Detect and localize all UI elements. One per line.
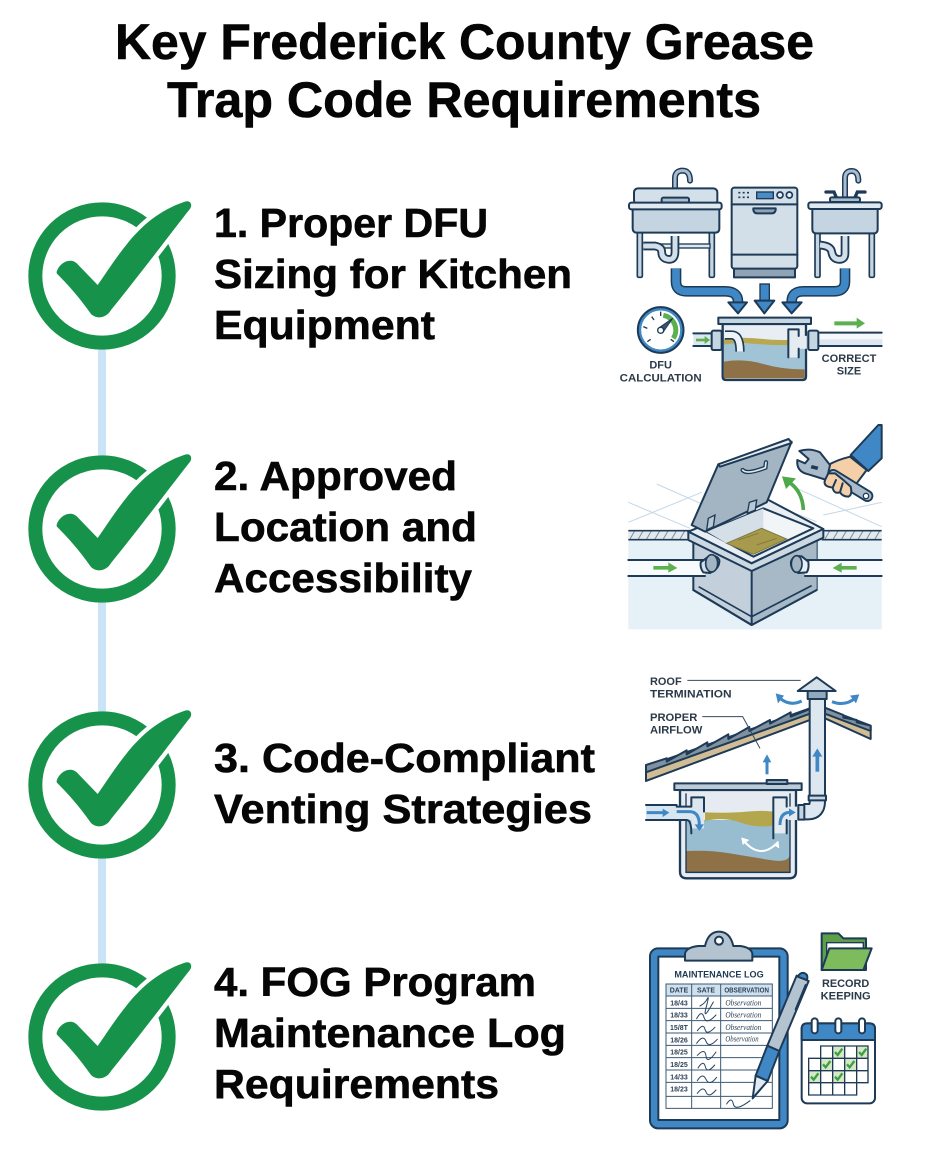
flow arrows into trap [676,268,845,313]
airflow arrows [763,693,859,774]
illustration: location and accessibility [628,425,882,629]
log table: DATE [670,988,689,995]
label: record keeping [821,978,871,1002]
label: DFU calculation [620,359,702,384]
folder icon [822,933,872,970]
heading: requirement 2: Location and [214,504,477,550]
title: Trap Code Requirements [167,72,761,128]
left sink [629,171,722,277]
timeline connector 3 [98,857,106,965]
label: proper airflow: AIRFLOW [650,725,703,737]
green flow arrow [834,318,865,329]
log table: 18/25 [670,1050,688,1057]
pipes [628,555,882,576]
outlet baffle [773,797,800,838]
heading: requirement 2 [214,453,477,601]
label: record keeping: KEEPING [821,990,871,1002]
icon: check badge 3 [35,710,191,852]
pen [753,973,809,1098]
log table: 14/33 [670,1074,688,1081]
label: proper airflow: PROPER [650,712,697,724]
log table: 18/25 [670,1062,688,1069]
log title: MAINTENANCE LOG [674,969,764,979]
heading: requirement 1: Sizing for Kitchen [214,251,572,297]
heading: requirement 2: Accessibility [214,555,472,601]
title: Key Frederick County Grease [115,14,814,70]
label: roof termination: ROOF [650,676,682,688]
green arrow left pipe [653,562,677,573]
log table: 18/26 [670,1037,688,1044]
floor and ground section [628,484,882,629]
roof [646,708,871,781]
log table: Observation [725,998,761,1007]
log table: SATE [697,988,715,995]
heading: requirement 3: 3. Code-Compliant [214,735,595,781]
vent pipe [798,677,836,812]
heading: requirement 4: 4. FOG Program [214,959,536,1005]
heading: requirement 1 [214,200,572,348]
heading: requirement 4: Maintenance Log [214,1010,566,1056]
log table: 18/33 [670,1013,688,1020]
illustration: maintenance log [650,932,875,1128]
heading: requirement 3: Venting Strategies [214,786,592,832]
heading: requirement 1: Equipment [214,302,435,348]
heading: requirement 1: 1. Proper DFU [214,200,488,246]
log table: Observation [725,1035,759,1044]
icon: check badge 1 [35,201,191,343]
green lift arrow [782,476,803,510]
clipboard [650,932,788,1128]
grease trap tank [693,318,882,380]
log table: 15/8T [670,1025,689,1032]
log table: 18/43 [670,1000,688,1007]
heading: requirement 4: Requirements [214,1061,499,1107]
title [115,14,814,128]
timeline connector 2 [98,601,106,713]
dishwasher [732,188,797,277]
icon: check badge 4 [35,962,191,1104]
inlet baffle [677,797,704,833]
heading: requirement 3 [214,735,595,832]
right sink [808,171,882,277]
log table: Observation [725,1023,761,1032]
illustration: DFU sizing [620,171,882,384]
label: DFU calculation: DFU [649,359,672,371]
label: correct size: SIZE [837,366,861,378]
label: correct size [822,353,877,378]
timeline connector 1 [98,348,106,458]
hand and wrench [797,425,882,499]
label: DFU calculation: CALCULATION [620,372,702,384]
illustration: venting [646,676,871,878]
vented tank [646,780,804,878]
log table: Observation [725,1011,761,1020]
label: proper airflow [650,712,760,748]
heading: requirement 4 [214,959,566,1107]
label: roof termination: TERMINATION [650,688,732,700]
trap box [688,499,823,625]
log table: OBSERVATION [724,988,769,995]
icon: check badge 2 [35,454,191,596]
label: roof termination [650,676,801,700]
calendar icon [802,1018,875,1103]
label: record keeping: RECORD [822,978,869,990]
heading: requirement 2: 2. Approved [214,453,457,499]
open lid [692,439,792,532]
log table: 18/23 [670,1087,688,1094]
log table [666,984,772,1108]
DFU gauge [638,307,683,353]
label: correct size: CORRECT [822,353,877,365]
green arrow right pipe [833,563,857,573]
